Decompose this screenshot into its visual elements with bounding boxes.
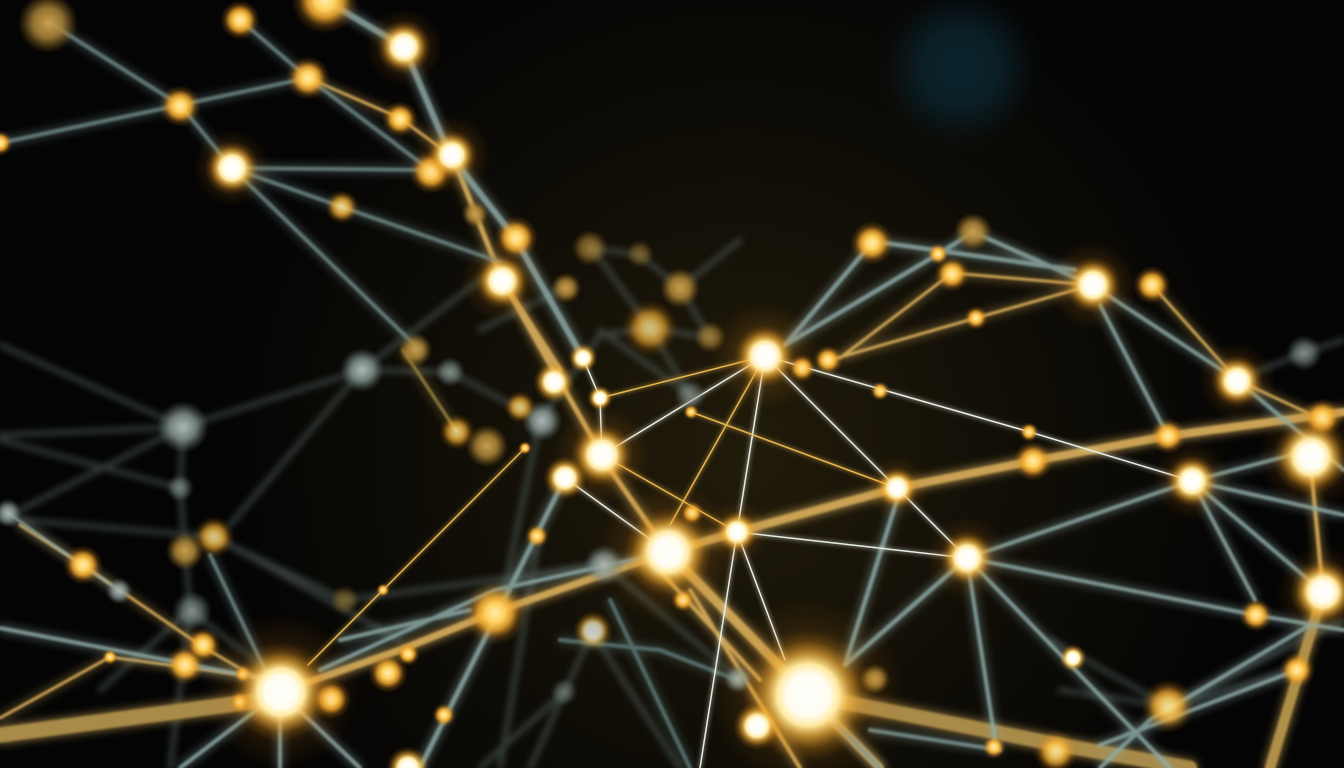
- dim grey nodes: [0, 335, 1322, 706]
- gold thin spokes: [308, 356, 897, 665]
- fine bright lines: [308, 356, 1192, 768]
- lower-left band: [0, 698, 280, 735]
- white hub spokes: [565, 356, 1192, 768]
- out-of-focus blue orb: [876, 0, 1044, 152]
- blurred background lines: [0, 240, 1344, 768]
